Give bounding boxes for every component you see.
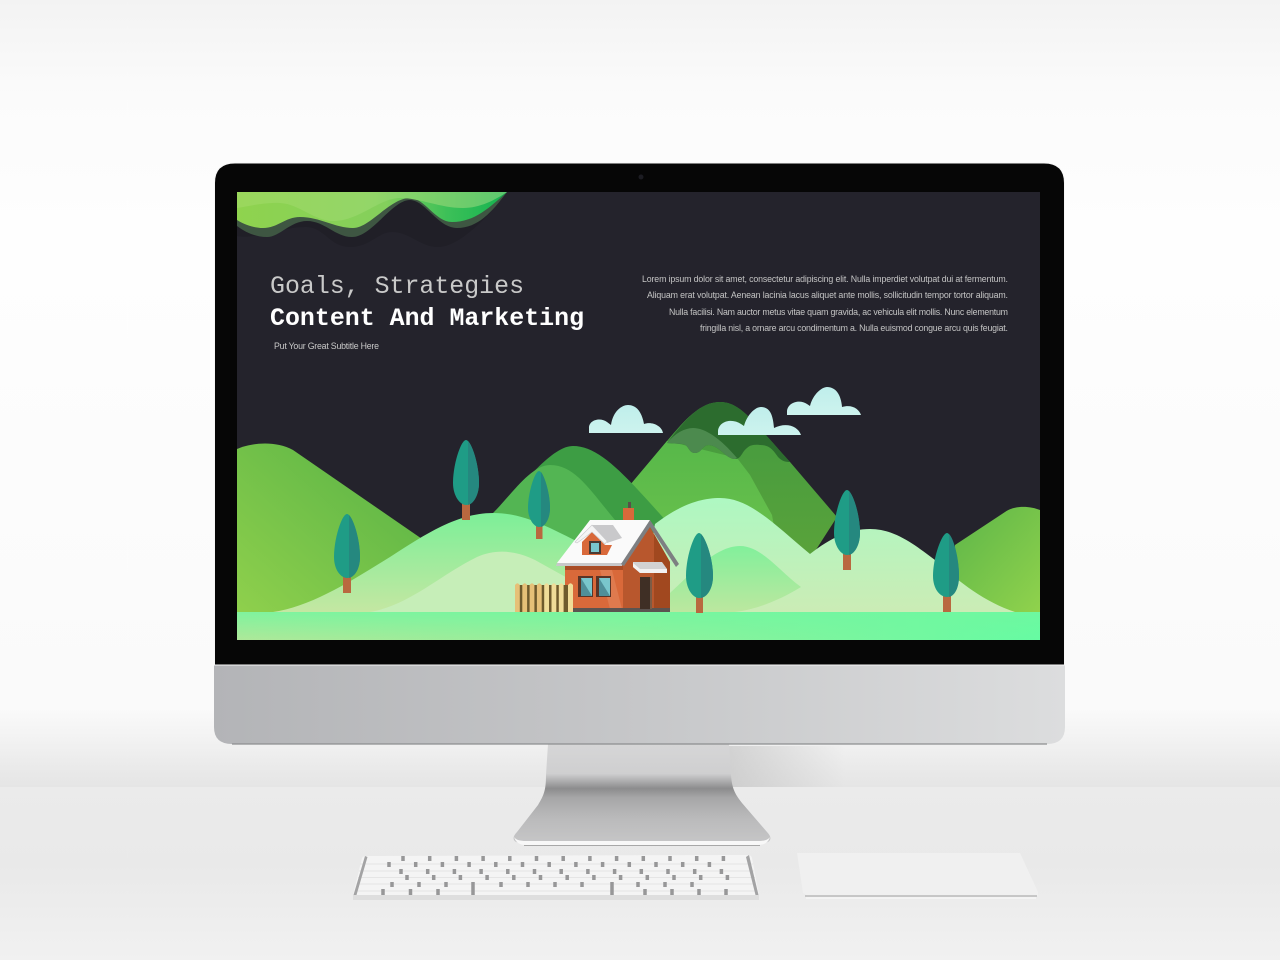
inner right hill — [670, 546, 801, 612]
desk surface — [0, 787, 1280, 960]
left hill — [237, 443, 430, 612]
trackpad — [797, 853, 1038, 898]
right hill — [950, 507, 1040, 612]
chimney — [623, 502, 634, 520]
title — [270, 273, 584, 333]
door — [640, 577, 652, 609]
tree 2 — [453, 440, 479, 520]
roof — [557, 520, 650, 563]
monitor — [214, 163, 1065, 744]
monitor stand — [514, 744, 770, 846]
subtitle: Put Your Great Subtitle Here — [274, 341, 379, 351]
monitor bezel — [214, 163, 1064, 665]
awning — [633, 562, 667, 573]
body paragraph: Nulla facilisi. Nam auctor metus vitae quam gravida, ac vehicula elit mollis. Nunc elementum — [669, 307, 1008, 317]
clouds — [589, 387, 861, 435]
screen background — [237, 192, 1040, 640]
inner left hill — [370, 552, 580, 612]
keyboard — [353, 855, 759, 900]
body paragraph: Aliquam erat volutpat. Aenean lacinia lacus aliquet ante mollis, sollicitudin tempor tortor aliquam. — [647, 290, 1008, 300]
stand shadow on wall — [725, 746, 845, 787]
cloud 2 — [718, 407, 801, 435]
monitor chin — [214, 665, 1065, 744]
cloud 3 — [787, 387, 861, 415]
front left hill — [273, 513, 590, 612]
mountain snow cap — [667, 402, 790, 462]
top wave decoration — [237, 192, 507, 247]
windows — [578, 576, 611, 597]
base strip — [573, 608, 670, 612]
cloud 1 — [589, 405, 663, 433]
tree 4 — [686, 533, 713, 613]
front right hills — [640, 498, 1015, 612]
back mountain centre — [625, 402, 837, 560]
title line 2: Content And Marketing — [270, 305, 584, 333]
fence — [515, 583, 573, 612]
body paragraph — [642, 274, 1008, 333]
tree 6 — [933, 533, 959, 612]
body paragraph: fringilla nisl, a ornare arcu condimentum a. Nulla euismod congue arcu quis feugiat. — [700, 323, 1008, 333]
tree 5 — [834, 490, 860, 570]
webcam — [638, 174, 644, 180]
dormer — [575, 525, 622, 555]
gable wall — [623, 527, 670, 609]
landscape — [237, 402, 1040, 640]
back hill centre left — [490, 446, 668, 560]
left wall — [565, 565, 623, 609]
house — [556, 502, 679, 612]
body paragraph: Lorem ipsum dolor sit amet, consectetur adipiscing elit. Nulla imperdiet volutpat dui at fermentum. — [642, 274, 1008, 284]
trees — [334, 440, 959, 613]
tree 1 — [334, 514, 360, 593]
ground — [237, 612, 1040, 640]
tree 3 — [528, 471, 550, 539]
keyboard key gaps — [383, 856, 727, 895]
title line 1: Goals, Strategies — [270, 273, 524, 301]
roof edge — [621, 520, 679, 567]
